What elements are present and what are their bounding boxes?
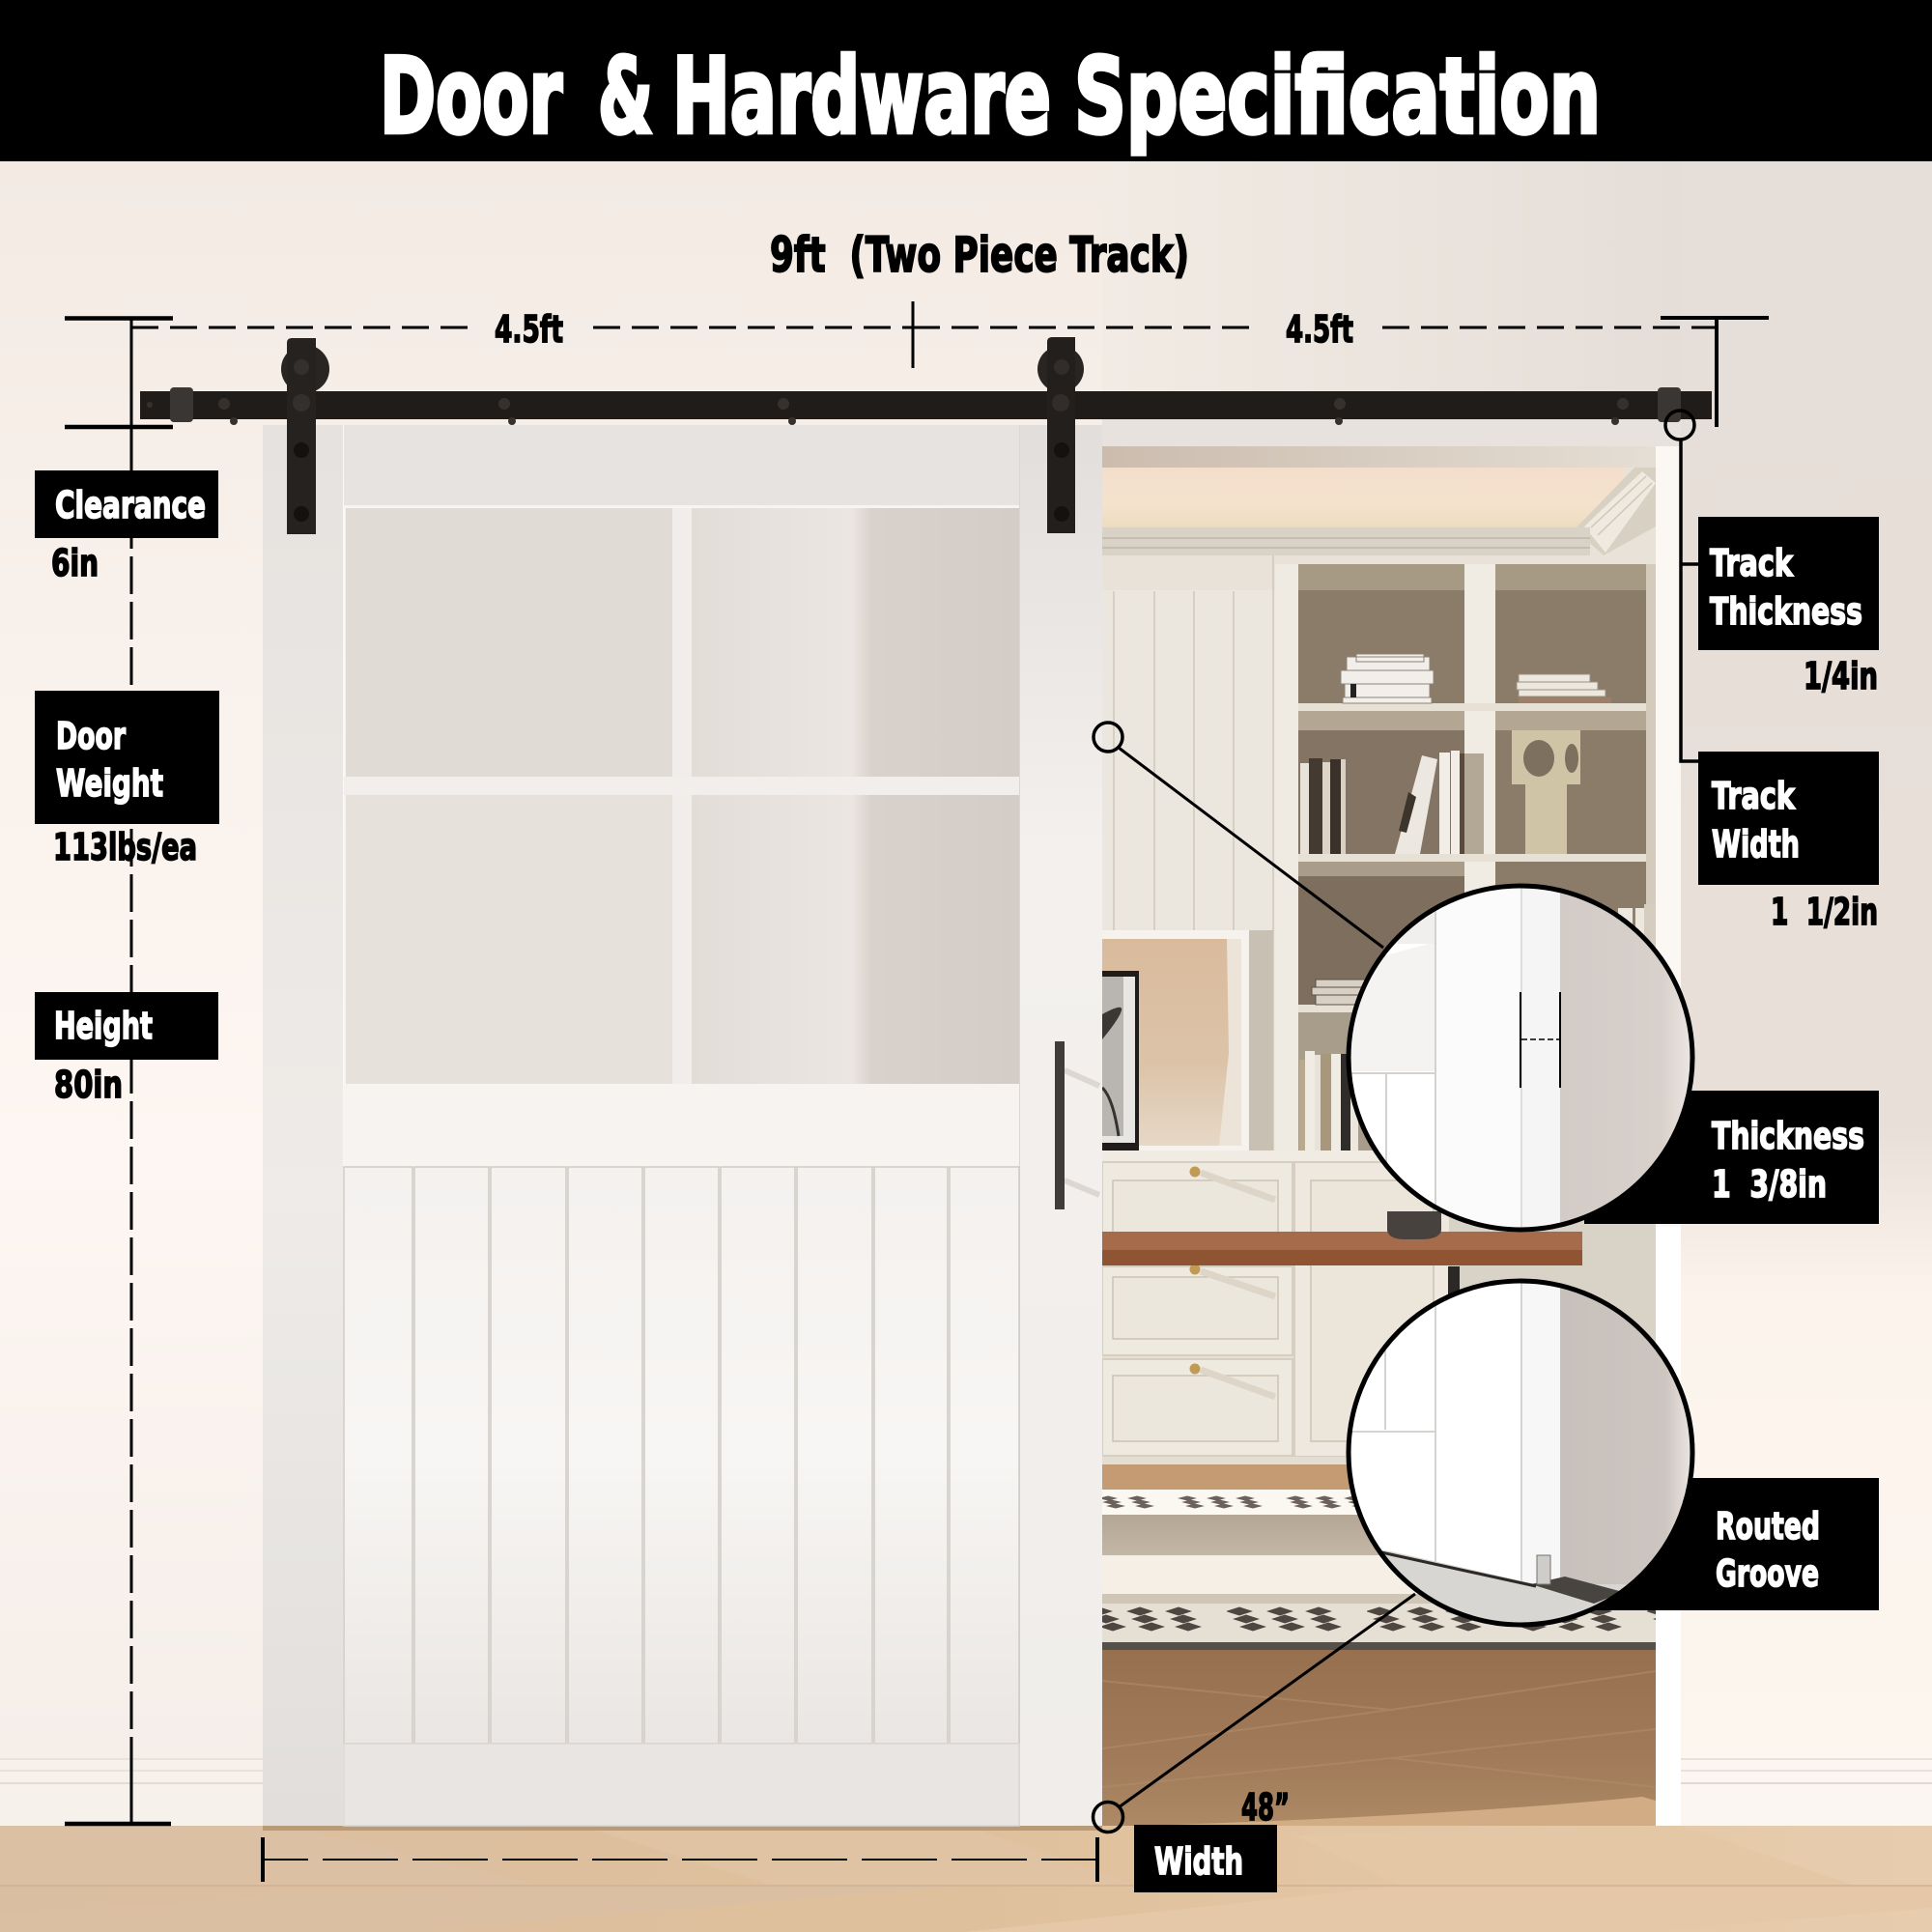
panelled wall (1102, 555, 1276, 1164)
value: track thickness: 1/4in (1804, 655, 1878, 697)
dimension: door width (263, 1837, 1097, 1882)
callout: track bracket (1665, 411, 1698, 761)
vertical planks (344, 1167, 1019, 1744)
label: track thickness: Thickness (1710, 590, 1862, 633)
title (380, 37, 1601, 157)
text: thickness: Thickness (1712, 1115, 1864, 1157)
dimension: clearance and height (65, 318, 173, 1824)
label box: thickness (1584, 1091, 1879, 1224)
label: door weight (35, 691, 219, 824)
text: thickness: 1 3/8in (1712, 1163, 1827, 1206)
baseboard left (0, 1758, 263, 1826)
callout line: door bottom (1119, 1594, 1415, 1807)
books on shelves (1299, 654, 1656, 1151)
label: door weight: Door (56, 715, 126, 757)
interior floor and rug (1102, 1457, 1656, 1826)
door casing (1102, 419, 1681, 1826)
value: clearance: 6in (51, 542, 99, 584)
framed art (1102, 930, 1249, 1151)
label: clearance: Clearance (55, 484, 206, 526)
title bar (0, 0, 1932, 161)
dimension: track width dashes (131, 301, 1769, 427)
right stopper (1658, 387, 1681, 422)
lock rail (344, 1084, 1019, 1166)
magnifier: door thickness (1347, 884, 1695, 1232)
mullions (672, 508, 692, 1084)
text: routed groove (1716, 1505, 1820, 1595)
text: routed groove: Routed (1716, 1505, 1820, 1548)
ceiling glow and crown moulding (1102, 446, 1656, 555)
label: left half track: 4.5ft (495, 308, 563, 351)
barn door (263, 425, 1102, 1826)
sculpture (1512, 730, 1580, 854)
title: Door (380, 37, 562, 157)
value: height: 80in (54, 1064, 123, 1106)
callout circle: door edge (1094, 723, 1122, 752)
label: right half track: 4.5ft (1286, 308, 1353, 351)
room seen through doorway (1102, 419, 1681, 1826)
text: routed groove: Groove (1716, 1552, 1819, 1595)
title: Hardware (672, 37, 1051, 157)
callout line: door edge (1119, 748, 1383, 948)
text: thickness (1712, 1115, 1864, 1206)
bottom rail (344, 1744, 1019, 1826)
label: clearance (35, 470, 218, 538)
label: height (35, 992, 218, 1060)
knob shadows (1201, 1173, 1275, 1397)
left stopper (170, 387, 193, 422)
track bolts (147, 398, 1629, 425)
callout circle: door bottom (1094, 1803, 1122, 1832)
label: track thickness (1698, 517, 1879, 650)
value: door width: 48” (1241, 1786, 1290, 1829)
thickness dimension mark (1520, 992, 1560, 1088)
title: & (598, 37, 653, 157)
top rail (344, 425, 1019, 507)
label: track width (1698, 752, 1879, 885)
label: track width: Width (1712, 823, 1800, 866)
sliding track (140, 387, 1712, 425)
value: door weight: 113lbs/ea (53, 826, 197, 868)
title: Specification (1074, 37, 1601, 157)
value: track width: 1 1/2in (1771, 891, 1878, 933)
cabinets (1102, 1151, 1656, 1462)
glass panes (346, 508, 1019, 1084)
baseboard right (1681, 1758, 1932, 1826)
label: width (1134, 1825, 1277, 1892)
label: width: Width (1154, 1840, 1243, 1883)
bookcase (1275, 564, 1656, 1163)
door handle (1055, 1041, 1099, 1209)
label box: routed groove (1584, 1478, 1879, 1610)
label: door weight: Weight (56, 762, 163, 805)
left hanger (281, 338, 329, 534)
label: track thickness: Track (1710, 542, 1794, 584)
right hanger (1037, 337, 1084, 533)
label: track width: Track (1712, 775, 1796, 817)
table with bowl (1102, 1211, 1582, 1295)
floor (0, 1826, 1932, 1932)
track length heading: 9ft (Two Piece Track) (770, 227, 1189, 283)
label: height: Height (54, 1005, 153, 1047)
magnifier: routed groove (1347, 1279, 1695, 1627)
